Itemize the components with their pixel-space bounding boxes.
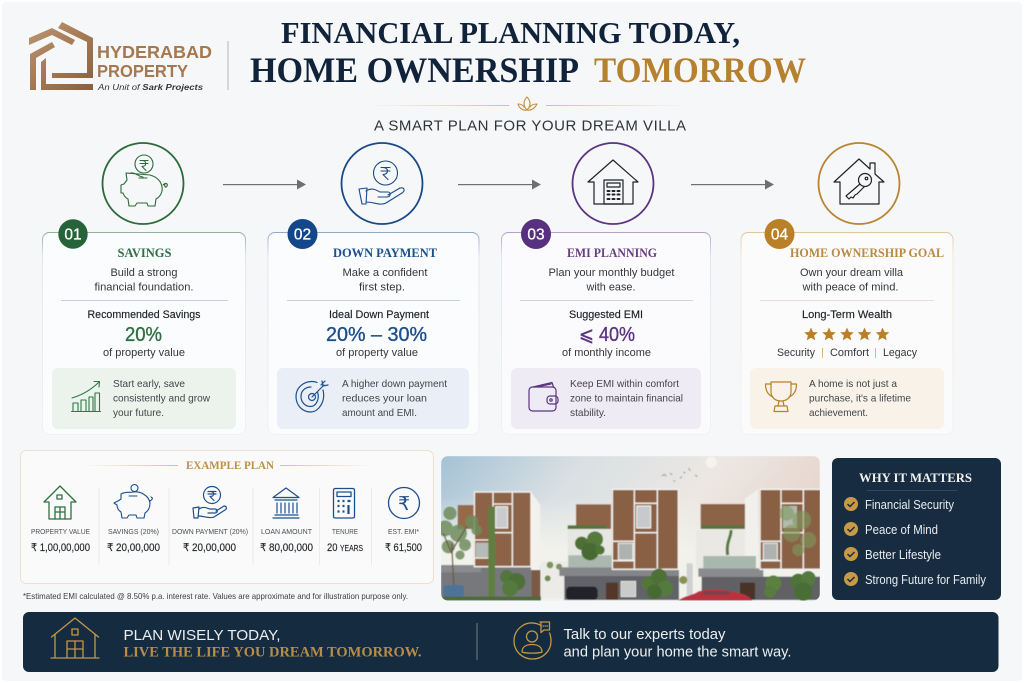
item: tenure: TENURE [332, 527, 358, 536]
icon: trophy [766, 382, 796, 412]
tip: EMI planning [511, 368, 701, 429]
metric: suggested EMI: Suggested EMI [569, 309, 643, 321]
description: savings [94, 267, 194, 294]
icon: expert with chat bubble [514, 622, 551, 659]
metric: ideal down payment: of property value [336, 347, 418, 359]
metric: ideal down payment: 20% – 30% [326, 324, 427, 346]
banner slogan [124, 627, 422, 660]
tip text: savings [113, 379, 211, 419]
tip text: EMI planning: Keep EMI within comfort [570, 379, 679, 390]
item: property value: ₹ 1,00,00,000 [31, 542, 90, 554]
tip text: EMI planning [570, 379, 683, 419]
description: savings: Build a strong [110, 267, 178, 279]
tip text: home ownership goal: achievement. [809, 408, 868, 419]
banner slogan: PLAN WISELY TODAY, [124, 627, 280, 644]
item: tenure [327, 488, 363, 554]
heading: why it matters: WHY IT MATTERS [859, 470, 972, 485]
values row: Legacy [883, 347, 918, 359]
item: better lifestyle: Better Lifestyle [865, 548, 941, 562]
description: EMI planning: with ease. [585, 282, 636, 294]
metric: suggested EMI [562, 309, 651, 359]
five stars [804, 328, 889, 340]
badge 04: 04 [771, 226, 788, 244]
item: loan amount: LOAN AMOUNT [261, 527, 313, 536]
icon: banner house [51, 618, 99, 658]
tip text: savings: consistently and grow [113, 394, 211, 404]
metric: suggested EMI: ⩽ 40% [579, 324, 635, 346]
panel: 01 savings [42, 219, 246, 434]
values row: Comfort [830, 347, 869, 359]
item: estimated EMI: ₹ [398, 494, 410, 515]
item: down payment [172, 486, 248, 554]
left villa [458, 505, 474, 529]
item: property value [31, 486, 90, 554]
item: down payment: ₹ 20,00,000 [183, 542, 236, 554]
metric: long-term wealth: Long-Term Wealth [802, 309, 892, 321]
title: HOME OWNERSHIP [250, 50, 579, 90]
item: strong future: Strong Future for Family [865, 573, 987, 587]
description: savings: financial foundation. [94, 282, 194, 294]
heading: home ownership goal: HOME OWNERSHIP GOAL [790, 245, 944, 260]
tip text: home ownership goal: purchase, it's a lifetime [809, 394, 911, 404]
badge 03 [521, 219, 551, 249]
metric: recommended savings: of property value [103, 347, 185, 359]
tip text: down payment [342, 379, 447, 419]
item: loan amount [260, 488, 313, 554]
banner slogan: LIVE THE LIFE YOU DREAM TOMORROW. [124, 644, 422, 660]
banner contact text [564, 627, 792, 660]
item: savings: SAVINGS (20%) [108, 527, 159, 536]
photo: villas illustration [437, 456, 823, 601]
icon: house with key [818, 143, 900, 224]
middle villa [541, 562, 571, 598]
heading: EMI planning: EMI PLANNING [567, 245, 657, 260]
icon: hand holding rupee [342, 143, 422, 224]
icon: house with calculator [572, 143, 654, 224]
ornament divider with lotus [366, 97, 690, 110]
metric: ideal down payment [326, 309, 429, 359]
banner contact text: Talk to our experts today [564, 627, 726, 643]
heading: down payment: DOWN PAYMENT [333, 245, 437, 260]
tip: savings [52, 368, 236, 429]
panel: 04 home ownership goal [741, 219, 953, 434]
heading: savings: SAVINGS [118, 245, 172, 260]
metric: recommended savings [88, 309, 201, 359]
values row [777, 347, 918, 359]
arrow 3 [691, 180, 774, 190]
item: financial security: Financial Security [865, 498, 955, 512]
metric: suggested EMI: of monthly income [562, 347, 651, 359]
banner contact text: and plan your home the smart way. [564, 644, 792, 660]
item: estimated EMI [385, 488, 422, 554]
item: peace of mind: Peace of Mind [865, 523, 938, 537]
logo: Hyderabad Property: PROPERTY [97, 61, 188, 81]
tip text: down payment: reduces your loan [342, 394, 427, 404]
description: down payment [342, 267, 428, 294]
item: estimated EMI: ₹ 61,500 [385, 542, 422, 554]
tip: home ownership goal [750, 368, 944, 429]
tip text: savings: Start early, save [113, 379, 185, 390]
arrow 2 [458, 180, 541, 190]
panel: 02 down payment [268, 219, 479, 434]
tip text: down payment: amount and EMI. [342, 408, 417, 419]
description: home ownership goal: with peace of mind. [801, 282, 898, 294]
logo: Hyderabad Property [29, 22, 228, 92]
panel: why it matters [832, 458, 1001, 600]
tip text: EMI planning: stability. [570, 408, 606, 419]
description: EMI planning [548, 267, 674, 294]
tip text: savings: your future. [113, 408, 164, 419]
metric: ideal down payment: Ideal Down Payment [329, 309, 429, 321]
icon: growth chart [72, 382, 100, 412]
tip text: EMI planning: zone to maintain financial [570, 394, 683, 404]
item: tenure: 20 YEARS [327, 542, 363, 554]
metric: recommended savings: Recommended Savings [88, 309, 201, 321]
logo: Hyderabad Property: An Unit of Sark Projects [97, 83, 204, 92]
values row: Security [777, 347, 816, 359]
item: property value: PROPERTY VALUE [31, 527, 90, 536]
tip text: down payment: A higher down payment [342, 379, 447, 390]
icon: piggy bank with rupee coin [102, 143, 184, 224]
tip text: home ownership goal [809, 379, 911, 419]
item: down payment: DOWN PAYMENT (20%) [172, 527, 248, 536]
description: down payment: Make a confident [342, 267, 428, 279]
title: FINANCIAL PLANNING TODAY, [281, 15, 740, 50]
item: loan amount: ₹ 80,00,000 [260, 542, 313, 554]
panel: example plan [20, 450, 434, 584]
badge 02: 02 [294, 226, 311, 244]
description: home ownership goal [800, 267, 903, 294]
arrow 1 [223, 180, 306, 190]
logo: Hyderabad Property: HYDERABAD [97, 42, 212, 62]
metric: recommended savings: 20% [125, 324, 162, 346]
icon: target with arrow [296, 381, 328, 412]
description: home ownership goal: Own your dream villa [800, 267, 903, 279]
item: better lifestyle [844, 547, 941, 562]
right villa [687, 563, 693, 595]
badge 04 [764, 219, 794, 249]
banner: call to action [23, 612, 998, 672]
metric: long-term wealth [777, 309, 918, 359]
panel: 03 EMI planning [502, 219, 710, 434]
badge 02 [288, 219, 318, 249]
item: savings: ₹ 20,00,000 [107, 542, 160, 554]
item: estimated EMI: EST. EMI* [388, 527, 419, 536]
badge 03: 03 [527, 226, 545, 244]
badge 01 [58, 219, 88, 249]
tip: down payment [277, 368, 469, 429]
item: peace of mind [844, 522, 938, 537]
footnote: *Estimated EMI calculated @ 8.50% p.a. interest rate. Values are approximate and for illustration purpose only. [23, 591, 408, 601]
description: down payment: first step. [359, 282, 405, 294]
title: TOMORROW [594, 50, 806, 90]
heading: example plan: EXAMPLE PLAN [186, 458, 274, 472]
badge 01: 01 [64, 226, 82, 244]
description: EMI planning: Plan your monthly budget [548, 267, 674, 279]
title [250, 15, 806, 90]
subtitle: A SMART PLAN FOR YOUR DREAM VILLA [374, 118, 686, 134]
icon: wallet [529, 382, 558, 411]
item: savings [107, 484, 160, 554]
tip text: home ownership goal: A home is not just a [809, 379, 897, 390]
